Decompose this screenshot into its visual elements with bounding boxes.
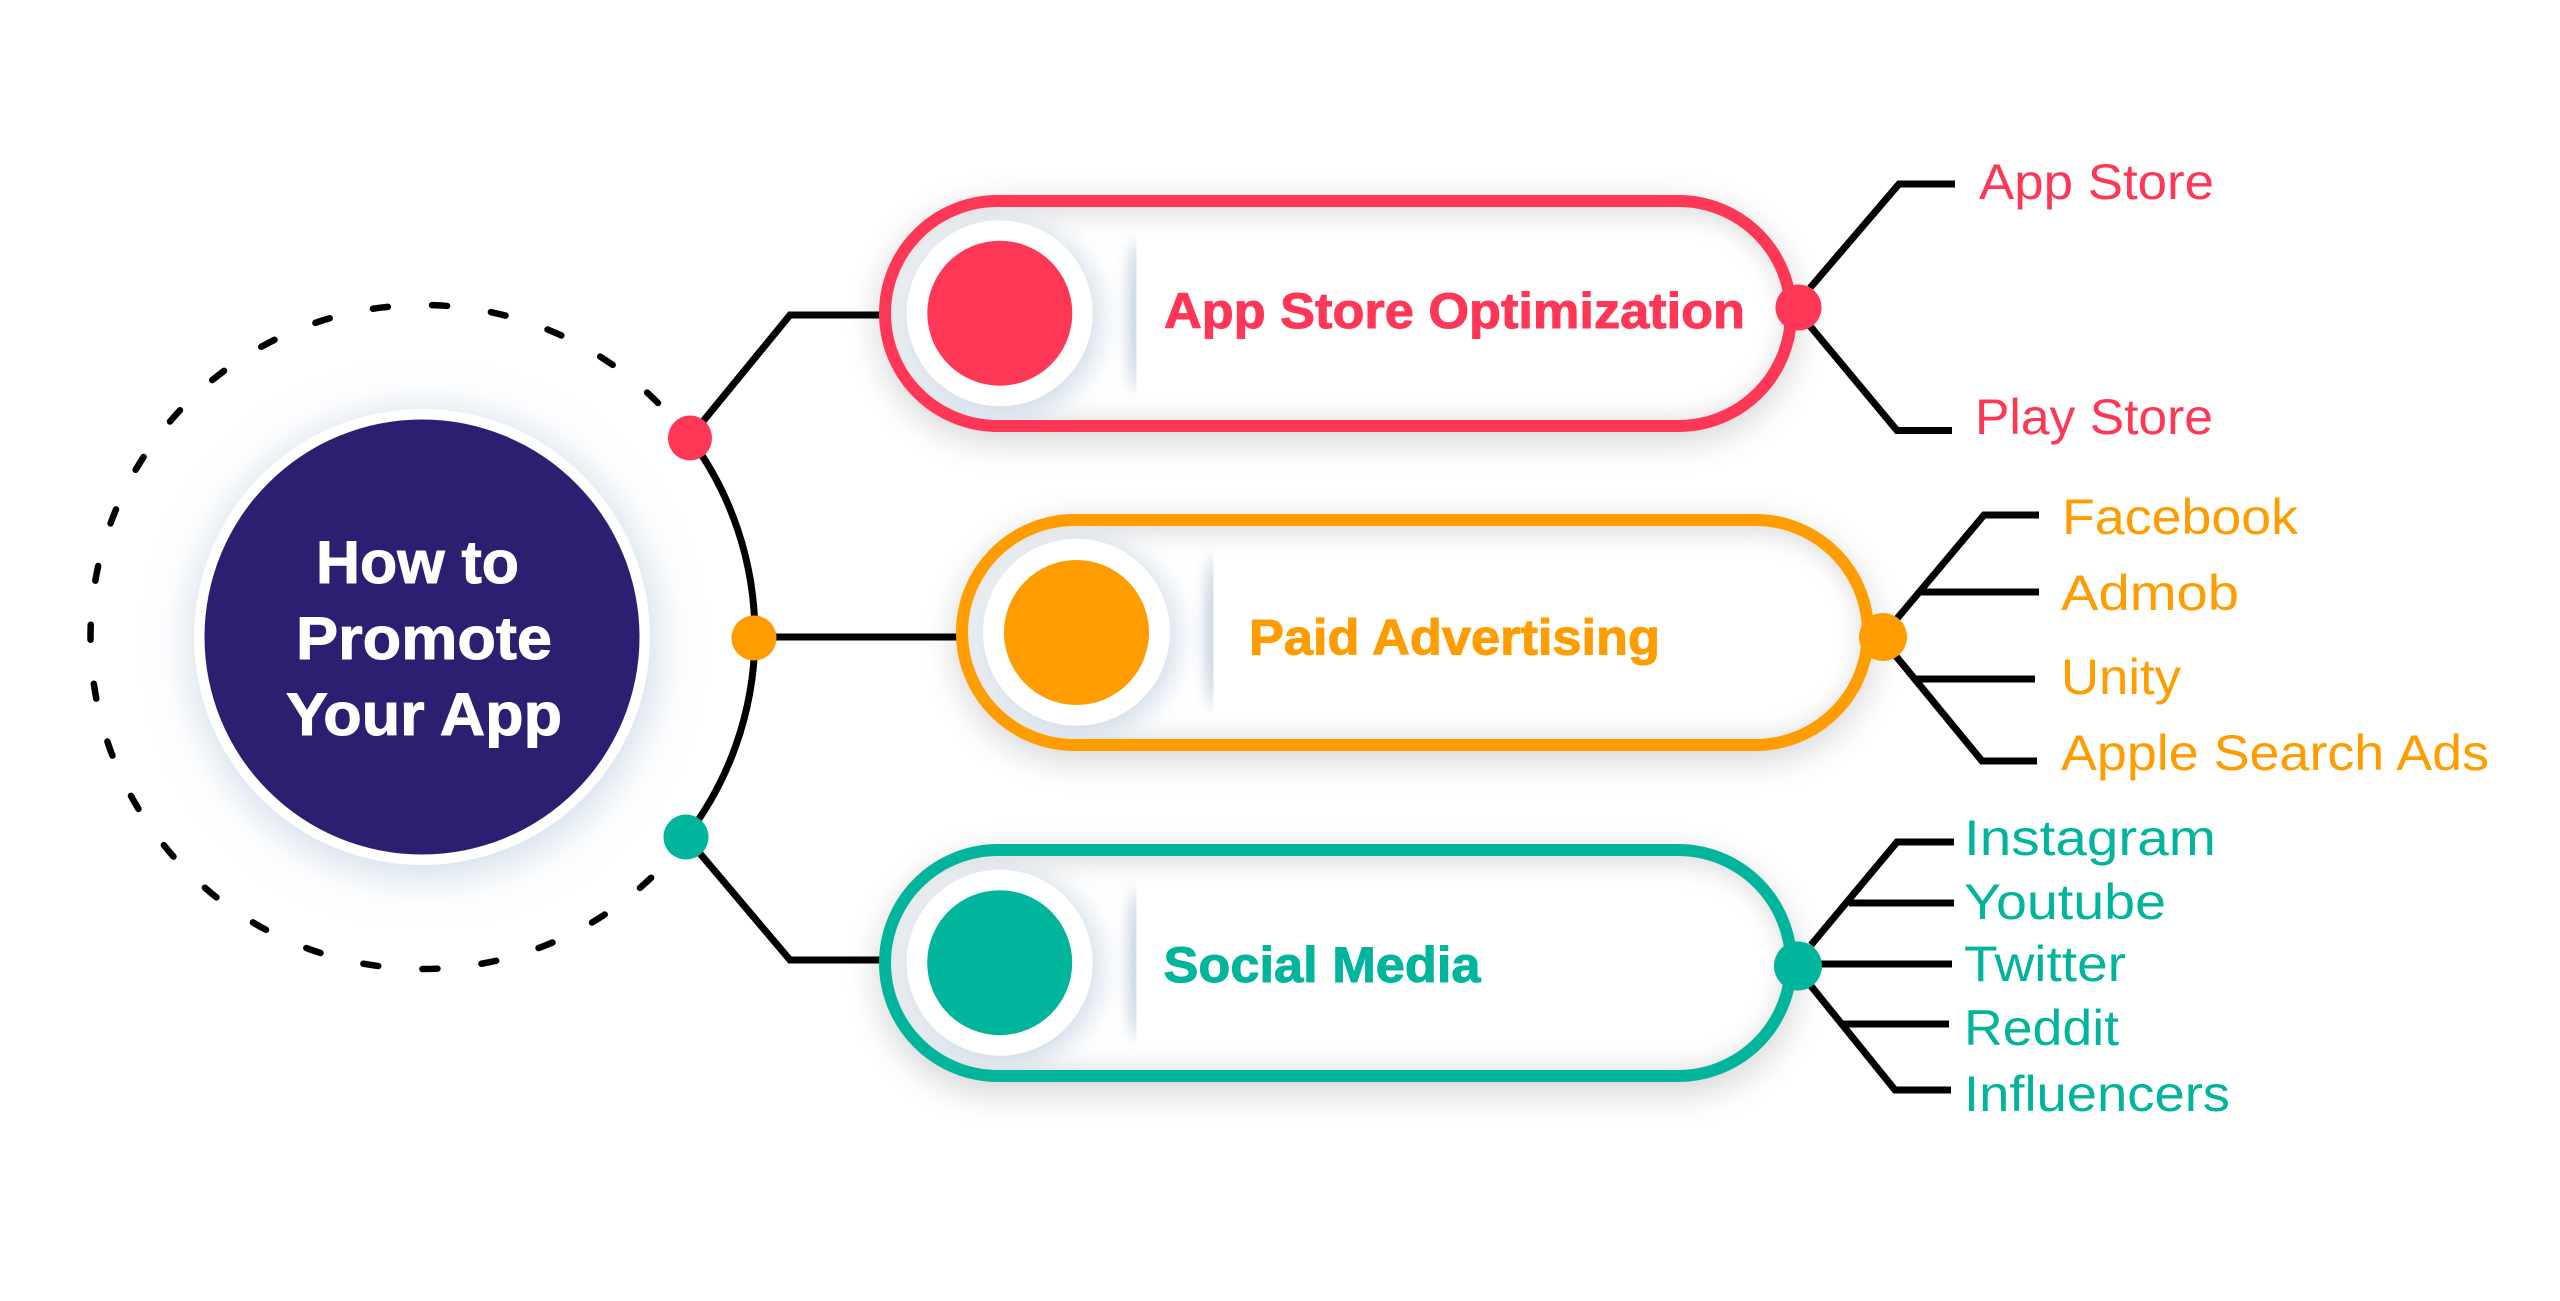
icon disc bbox=[907, 220, 1093, 406]
list: Social Media items bbox=[1964, 810, 2230, 1122]
list: Paid Advertising items: Unity bbox=[2061, 649, 2181, 705]
branch lines: Social Media bbox=[1811, 842, 1954, 1090]
panel: App Store Optimization bbox=[876, 200, 1800, 441]
node dot: red right bbox=[1776, 284, 1822, 330]
list: Social Media items: Reddit bbox=[1964, 1000, 2119, 1056]
panel: Paid Advertising bbox=[953, 519, 1877, 760]
list: App Store Optimization items: Play Store bbox=[1975, 389, 2213, 445]
heading: Social Media bbox=[1164, 937, 1482, 993]
list: Paid Advertising items bbox=[2061, 489, 2489, 781]
list: Paid Advertising items: Admob bbox=[2061, 565, 2239, 621]
list: App Store Optimization items: App Store bbox=[1979, 154, 2214, 210]
title: Your App bbox=[286, 681, 562, 748]
list: Social Media items: Youtube bbox=[1964, 874, 2166, 930]
list: App Store Optimization items bbox=[1975, 154, 2214, 445]
heading: Paid Advertising bbox=[1249, 610, 1660, 666]
panel: Social Media bbox=[876, 849, 1800, 1093]
dashed orbit circle bbox=[91, 305, 658, 969]
list: Social Media items: Twitter bbox=[1964, 936, 2126, 992]
node dot: teal bbox=[664, 814, 708, 860]
list: Paid Advertising items: Apple Search Ads bbox=[2061, 725, 2489, 781]
list: Social Media items: Instagram bbox=[1964, 810, 2216, 866]
list: Paid Advertising items: Facebook bbox=[2062, 489, 2299, 545]
heading: App Store Optimization bbox=[1164, 283, 1745, 339]
node dot: orange bbox=[732, 616, 776, 660]
branch lines: App Store Optimization bbox=[1810, 184, 1955, 430]
central hub: How to Promote Your App bbox=[192, 409, 656, 876]
icon disc bbox=[983, 539, 1170, 726]
title: Promote bbox=[296, 605, 552, 672]
node dot: red bbox=[668, 416, 712, 460]
icon disc bbox=[907, 870, 1093, 1056]
node dot: teal right bbox=[1774, 942, 1822, 990]
node dot: orange right bbox=[1859, 613, 1907, 661]
branch lines: Paid Advertising bbox=[1895, 515, 2039, 761]
connector: solid arc to branches bbox=[686, 315, 960, 960]
title: How to bbox=[316, 529, 519, 596]
list: Social Media items: Influencers bbox=[1964, 1066, 2230, 1122]
